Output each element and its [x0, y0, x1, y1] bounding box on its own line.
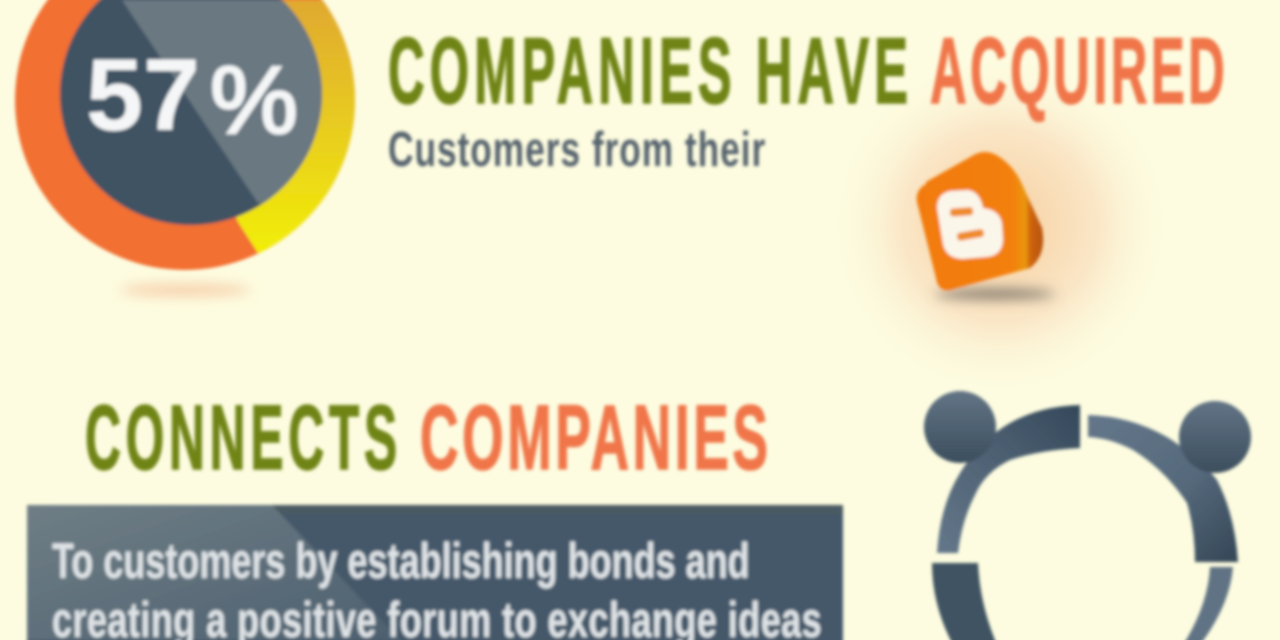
- donut chart: 57%: [15, 0, 370, 296]
- heading: connects companies: CONNECTS: [85, 386, 397, 489]
- icon: blogger: [917, 152, 1055, 299]
- subheading: customers from their: Customers from their: [388, 122, 765, 177]
- donut inner dark disc: [60, 0, 322, 225]
- donut reflection: [120, 284, 250, 296]
- donut orange segment: [15, 0, 355, 270]
- heading: connects companies: [85, 386, 768, 489]
- bottom left segment: [932, 563, 997, 640]
- donut value: [86, 38, 298, 154]
- icon shadow: [935, 289, 1055, 299]
- left person arm: [937, 405, 1080, 553]
- donut value: 57: [86, 38, 200, 152]
- donut inner light wedge: [122, 0, 340, 203]
- glow behind blogger icon: [825, 50, 1175, 400]
- right person arm: [1088, 415, 1238, 562]
- heading: companies have acquired: COMPANIES HAVE: [388, 20, 908, 124]
- heading: companies have acquired: [388, 20, 1225, 124]
- icon body: [917, 152, 1043, 290]
- icon letter b: [937, 190, 1003, 259]
- donut yellow segment: [234, 0, 357, 255]
- panel top shadow: [27, 505, 843, 514]
- icon letter slit top: [950, 207, 973, 217]
- donut value: %: [210, 47, 298, 154]
- heading: companies have acquired: ACQUIRED: [930, 20, 1225, 124]
- bottom right segment: [1183, 567, 1233, 640]
- heading: connects companies: COMPANIES: [420, 386, 768, 489]
- panel text line 1: To customers by establishing bonds and: [52, 534, 750, 589]
- icon: connected people ring: [924, 391, 1251, 640]
- right person head: [1179, 401, 1251, 473]
- panel light wedge: [27, 505, 400, 640]
- panel background: [27, 505, 843, 640]
- panel: connection description: [27, 505, 843, 640]
- icon letter slit bottom: [957, 229, 984, 241]
- left person head: [924, 391, 996, 463]
